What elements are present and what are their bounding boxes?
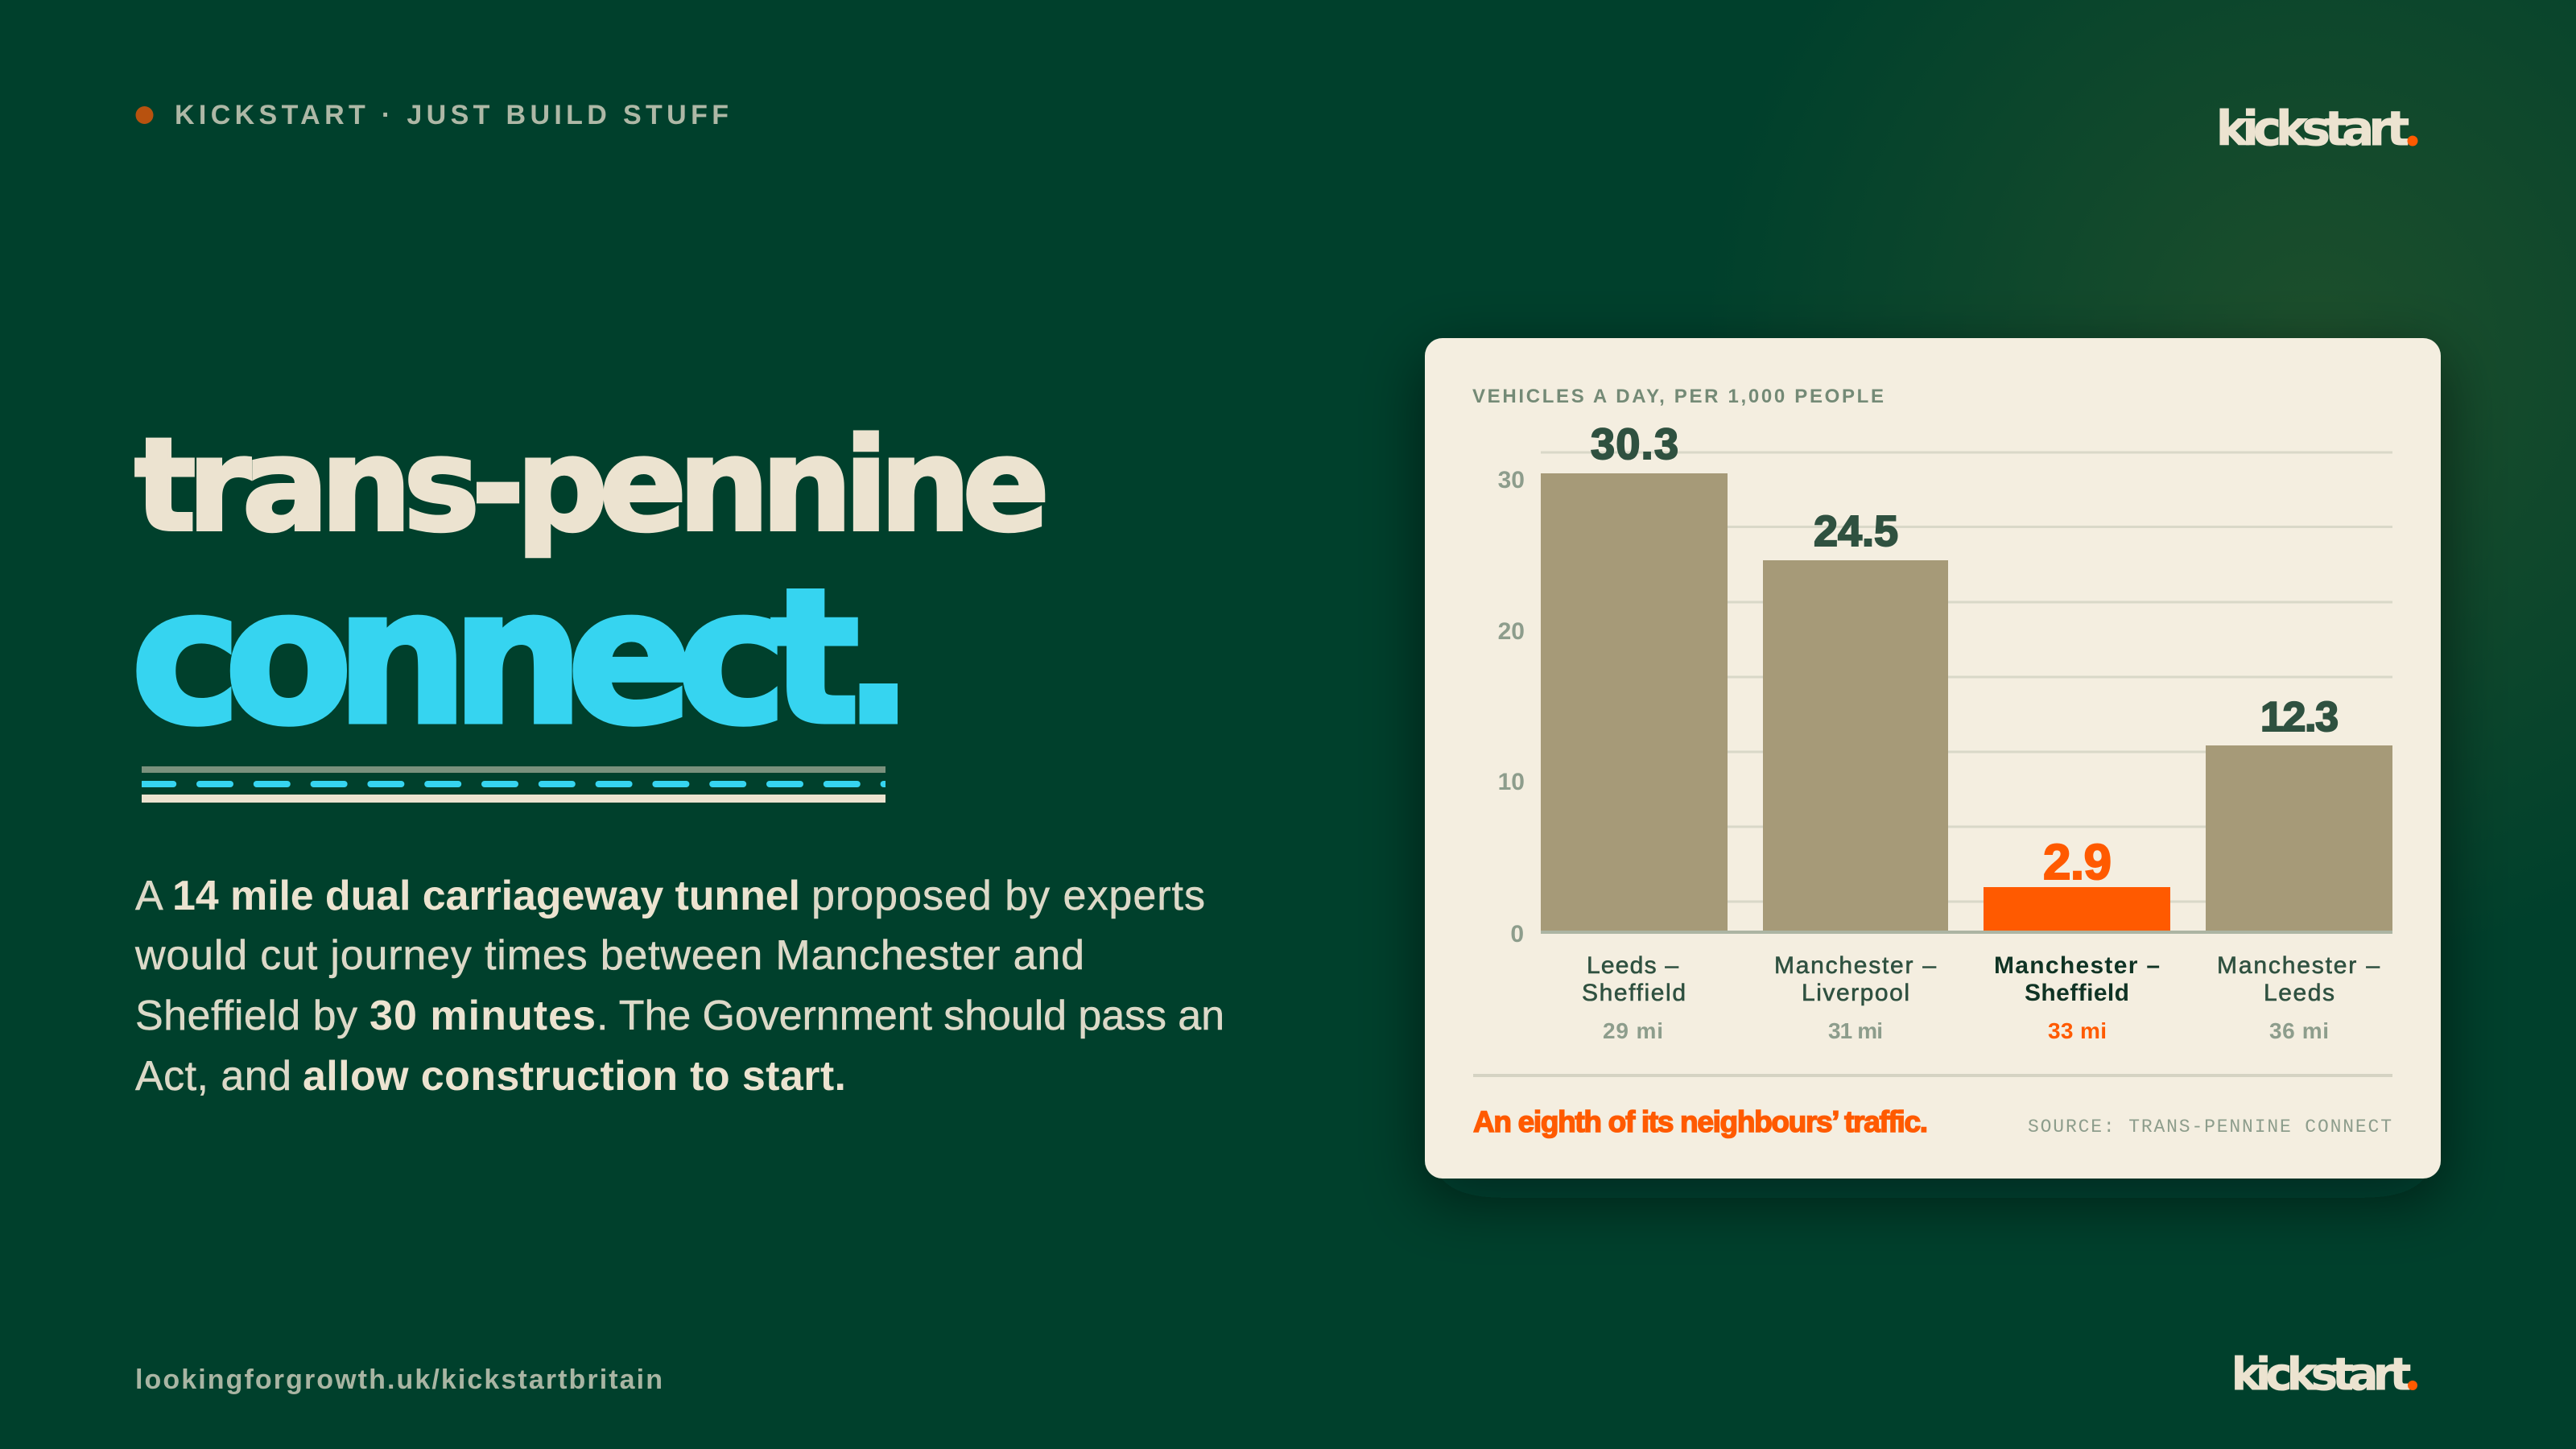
body paragraph: A: [135, 873, 163, 919]
body paragraph: proposed by experts: [811, 873, 1205, 919]
header eyebrow: KICKSTART · JUST BUILD STUFF: [175, 100, 729, 130]
y axis labels: 20: [1498, 618, 1525, 645]
category labels: 29 mi: [1603, 1018, 1663, 1043]
card divider: [1473, 1074, 2392, 1077]
logo: kickstart bottom: kickstart: [2231, 1348, 2411, 1400]
category labels: 36 mi: [2269, 1018, 2329, 1043]
category labels: [1582, 952, 2380, 1043]
bar values: 12.3: [2260, 694, 2339, 741]
category labels: 33 mi: [2048, 1018, 2107, 1043]
y axis labels: 0: [1510, 921, 1524, 947]
category labels: Manchester –: [1774, 952, 1936, 979]
title: trans-pennine: [134, 410, 1050, 560]
chart title: VEHICLES A DAY, PER 1,000 PEOPLE: [1472, 386, 1884, 407]
source note: SOURCE: TRANS-PENNINE CONNECT: [2028, 1117, 2392, 1137]
category labels: Manchester –: [1994, 952, 2160, 979]
gridlines: [1541, 451, 2392, 903]
y axis labels: [1498, 467, 1525, 947]
y axis labels: 30: [1498, 467, 1525, 493]
category labels: 31 mi: [1828, 1018, 1883, 1043]
title: connect.: [131, 551, 914, 766]
road graphic: [139, 766, 918, 803]
body paragraph: . The Government should pass an: [597, 993, 1224, 1039]
bar values: 30.3: [1591, 420, 1678, 469]
category labels: Sheffield: [2025, 980, 2129, 1006]
body paragraph: allow construction to start.: [303, 1053, 846, 1100]
footer url: lookingforgrowth.uk/kickstartbritain: [135, 1364, 663, 1395]
category labels: Liverpool: [1802, 980, 1909, 1006]
body paragraph: would cut journey times between Manchester and: [134, 932, 1084, 979]
callout: An eighth of its neighbours’ traffic.: [1473, 1105, 1928, 1138]
body paragraph: 14 mile dual carriageway tunnel: [172, 873, 800, 919]
category labels: Leeds –: [1587, 952, 1678, 979]
bar values: 2.9: [2043, 835, 2112, 890]
body paragraph: 30 minutes: [369, 993, 596, 1039]
y axis labels: 10: [1498, 769, 1525, 795]
logo: kickstart top: kickstart: [2216, 101, 2409, 156]
body paragraph: [134, 873, 1224, 1100]
title: [131, 410, 1050, 766]
category labels: Manchester –: [2217, 952, 2380, 979]
bar values: [1591, 420, 2339, 890]
body paragraph: Act, and: [135, 1053, 291, 1100]
category labels: Leeds: [2264, 980, 2334, 1006]
panel: chart card: [1425, 338, 2441, 1179]
body paragraph: Sheffield by: [135, 993, 357, 1039]
bar values: 24.5: [1814, 507, 1898, 555]
category labels: Sheffield: [1582, 980, 1686, 1006]
bar chart: [1541, 473, 2392, 934]
